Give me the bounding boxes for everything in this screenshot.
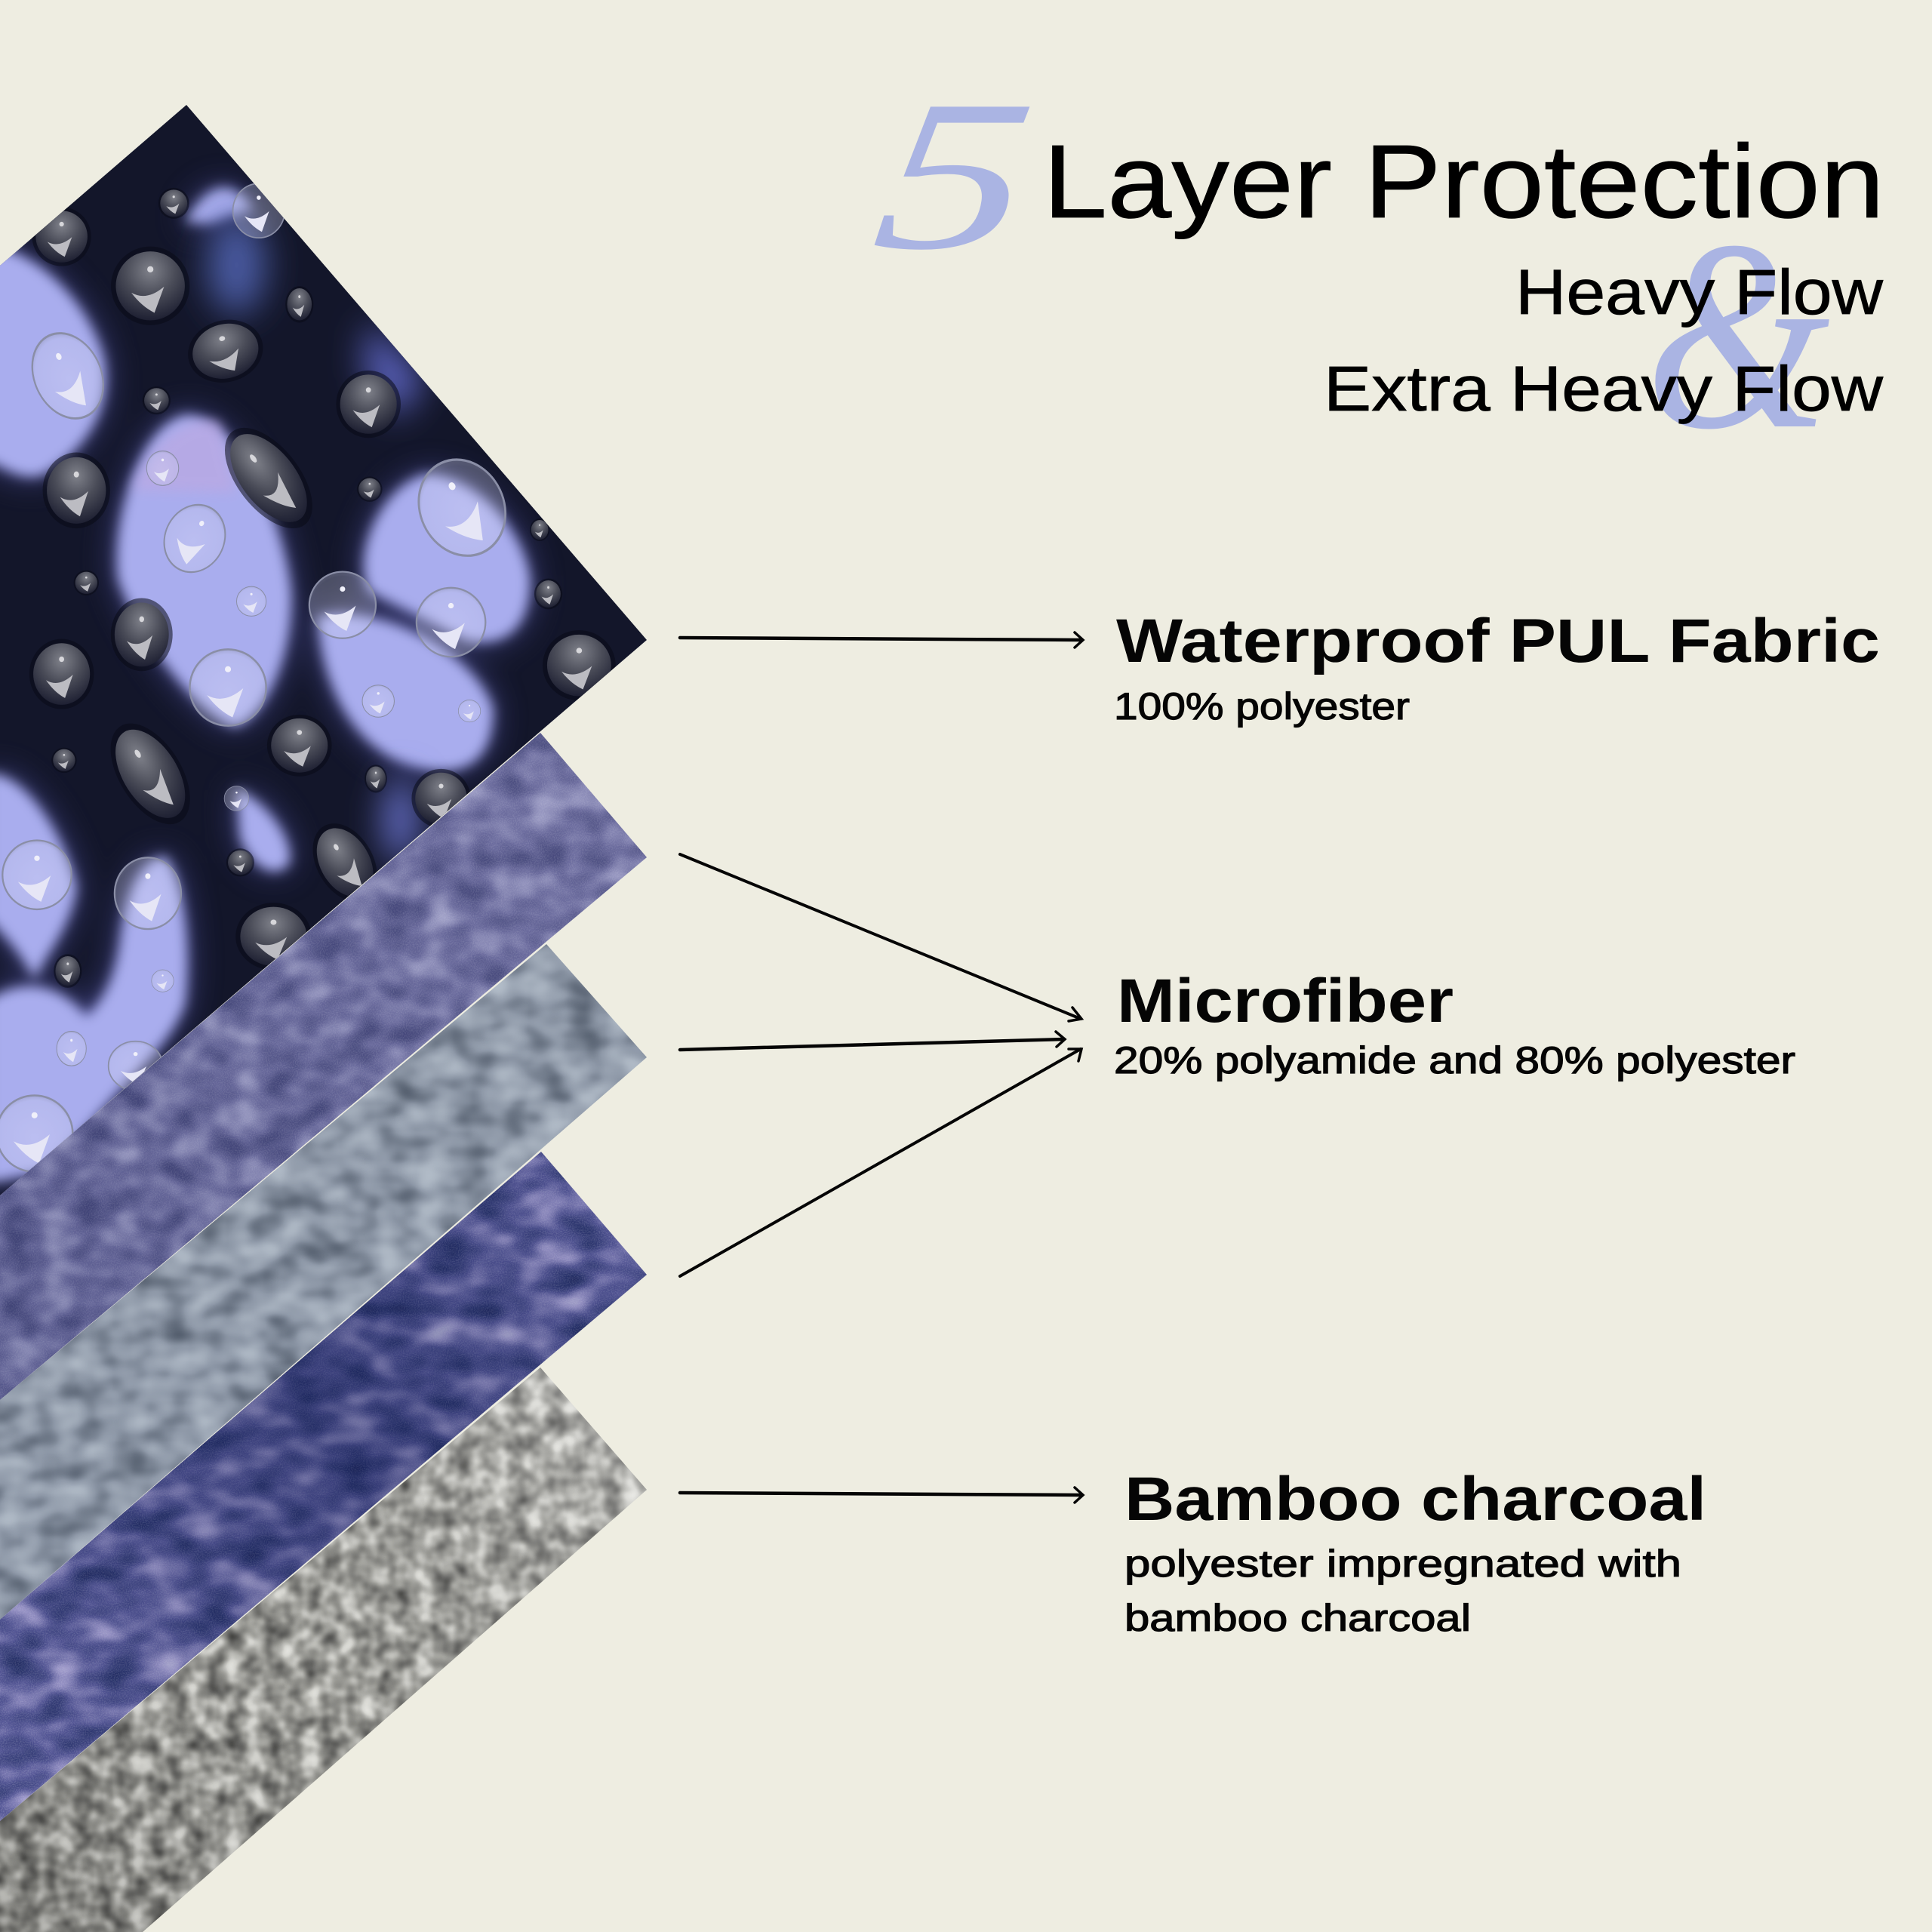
blurred lilac petals [0, 188, 530, 1183]
arrow: layer 4 to microfiber [680, 1049, 1081, 1276]
arrow: layer 1 to waterproof [680, 632, 1083, 648]
ampersand: & [1645, 184, 1831, 485]
fabric layer 2: microfiber purple [0, 724, 657, 1411]
label detail: 100% polyester [1114, 685, 1410, 728]
arrow: layer 5 to bamboo charcoal [680, 1487, 1083, 1503]
fabric layer 3: microfiber grey-blue [0, 936, 657, 1630]
label: bamboo charcoal [1124, 1465, 1706, 1639]
label: waterproof PUL fabric [1114, 607, 1880, 728]
label: microfiber [1114, 967, 1795, 1081]
numeral 5: 5 [863, 56, 1046, 294]
label heading: Microfiber [1117, 967, 1454, 1035]
subtitle line 1: Heavy Flow [1515, 257, 1883, 328]
droplets [0, 183, 616, 1172]
fabric layer 4: microfiber navy [0, 1143, 657, 1830]
fabric layer 1: waterproof PUL with water drops [0, 105, 647, 1195]
label heading: Bamboo charcoal [1124, 1465, 1706, 1534]
subtitle [1324, 184, 1883, 485]
subtitle line 2: Extra Heavy Flow [1324, 353, 1883, 424]
fabric layer 5: bamboo charcoal [0, 1358, 657, 1932]
label detail line 2: bamboo charcoal [1124, 1597, 1471, 1639]
label heading: Waterproof PUL Fabric [1116, 607, 1880, 675]
arrow: layer 3 to microfiber [680, 1032, 1065, 1050]
heading: Layer Protection [1043, 124, 1884, 240]
title [863, 56, 1884, 294]
arrow: layer 2 to microfiber [680, 854, 1081, 1021]
label detail: 20% polyamide and 80% polyester [1114, 1039, 1795, 1081]
label detail line 1: polyester impregnated with [1124, 1543, 1681, 1585]
